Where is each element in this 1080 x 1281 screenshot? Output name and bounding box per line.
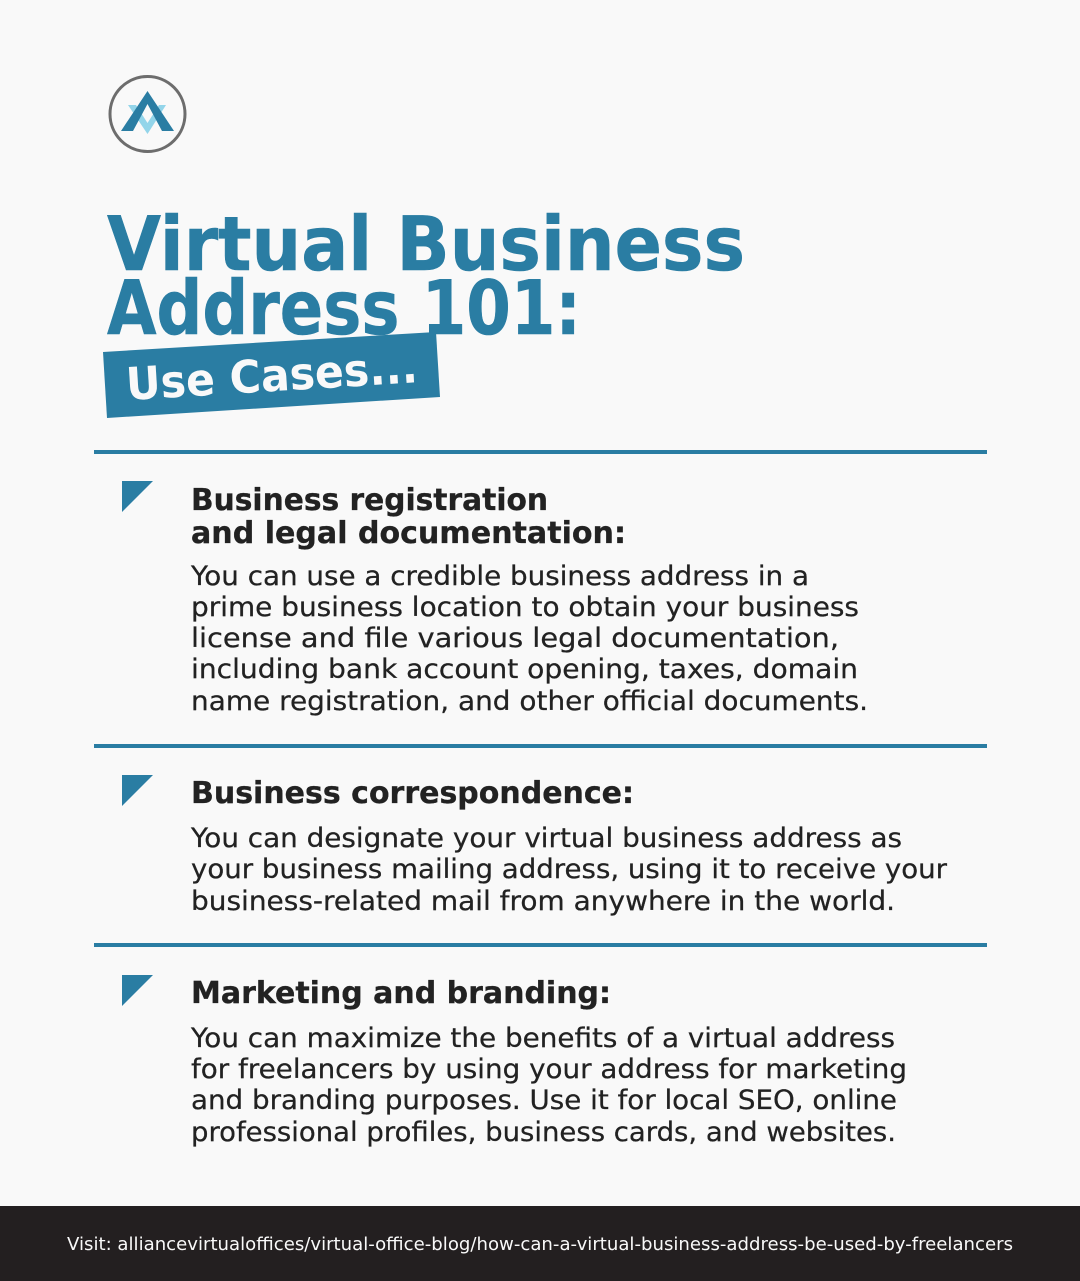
text block: business registration: name registration, and other official documents.	[191, 686, 868, 717]
subtitle banner: Use Cases...	[124, 340, 419, 411]
title: Address 101:	[107, 264, 581, 352]
panel: business registration	[122, 481, 868, 717]
footer bar	[0, 1206, 1080, 1281]
footer bar: Visit: alliancevirtualoffices/virtual-office-blog/how-can-a-virtual-business-address-be-used-by-freelancers	[67, 1235, 1013, 1255]
heading: business registration	[191, 483, 626, 551]
text block: marketing and branding: professional profiles, business cards, and websites.	[191, 1117, 896, 1148]
icon: company logo	[110, 76, 185, 152]
text block: marketing and branding: for freelancers by using your address for marketing	[191, 1054, 907, 1085]
heading: business registration: and legal documentation:	[191, 516, 626, 551]
text block: business correspondence: business-related mail from anywhere in the world.	[191, 886, 895, 917]
text block: marketing and branding: and branding purposes. Use it for local SEO, online	[191, 1085, 897, 1116]
title: Virtual Business	[107, 200, 745, 288]
text block: business registration: prime business location to obtain your business	[191, 592, 859, 623]
text block: business registration	[190, 561, 868, 717]
text block: business registration: You can use a credible business address in a	[190, 561, 809, 592]
text block: business correspondence	[190, 823, 947, 917]
text block: marketing and branding	[190, 1023, 907, 1148]
icon: triangle bullet	[122, 975, 153, 1006]
heading: business registration: Business registration	[191, 483, 548, 518]
text block: business correspondence: You can designate your virtual business address as	[190, 823, 902, 854]
heading: marketing and branding: Marketing and branding:	[191, 976, 611, 1011]
icon: triangle bullet	[122, 775, 153, 806]
title	[107, 200, 745, 352]
panel: business correspondence	[122, 775, 947, 917]
text block: business registration: including bank account opening, taxes, domain	[191, 654, 858, 685]
text block: business registration: license and file various legal documentation,	[191, 623, 839, 654]
icon: triangle bullet	[122, 481, 153, 512]
text block: marketing and branding: You can maximize the benefits of a virtual address	[190, 1023, 895, 1054]
panel: marketing and branding	[122, 975, 907, 1148]
heading: business correspondence: Business correspondence:	[191, 776, 634, 811]
text block: business correspondence: your business mailing address, using it to receive your	[191, 854, 947, 885]
